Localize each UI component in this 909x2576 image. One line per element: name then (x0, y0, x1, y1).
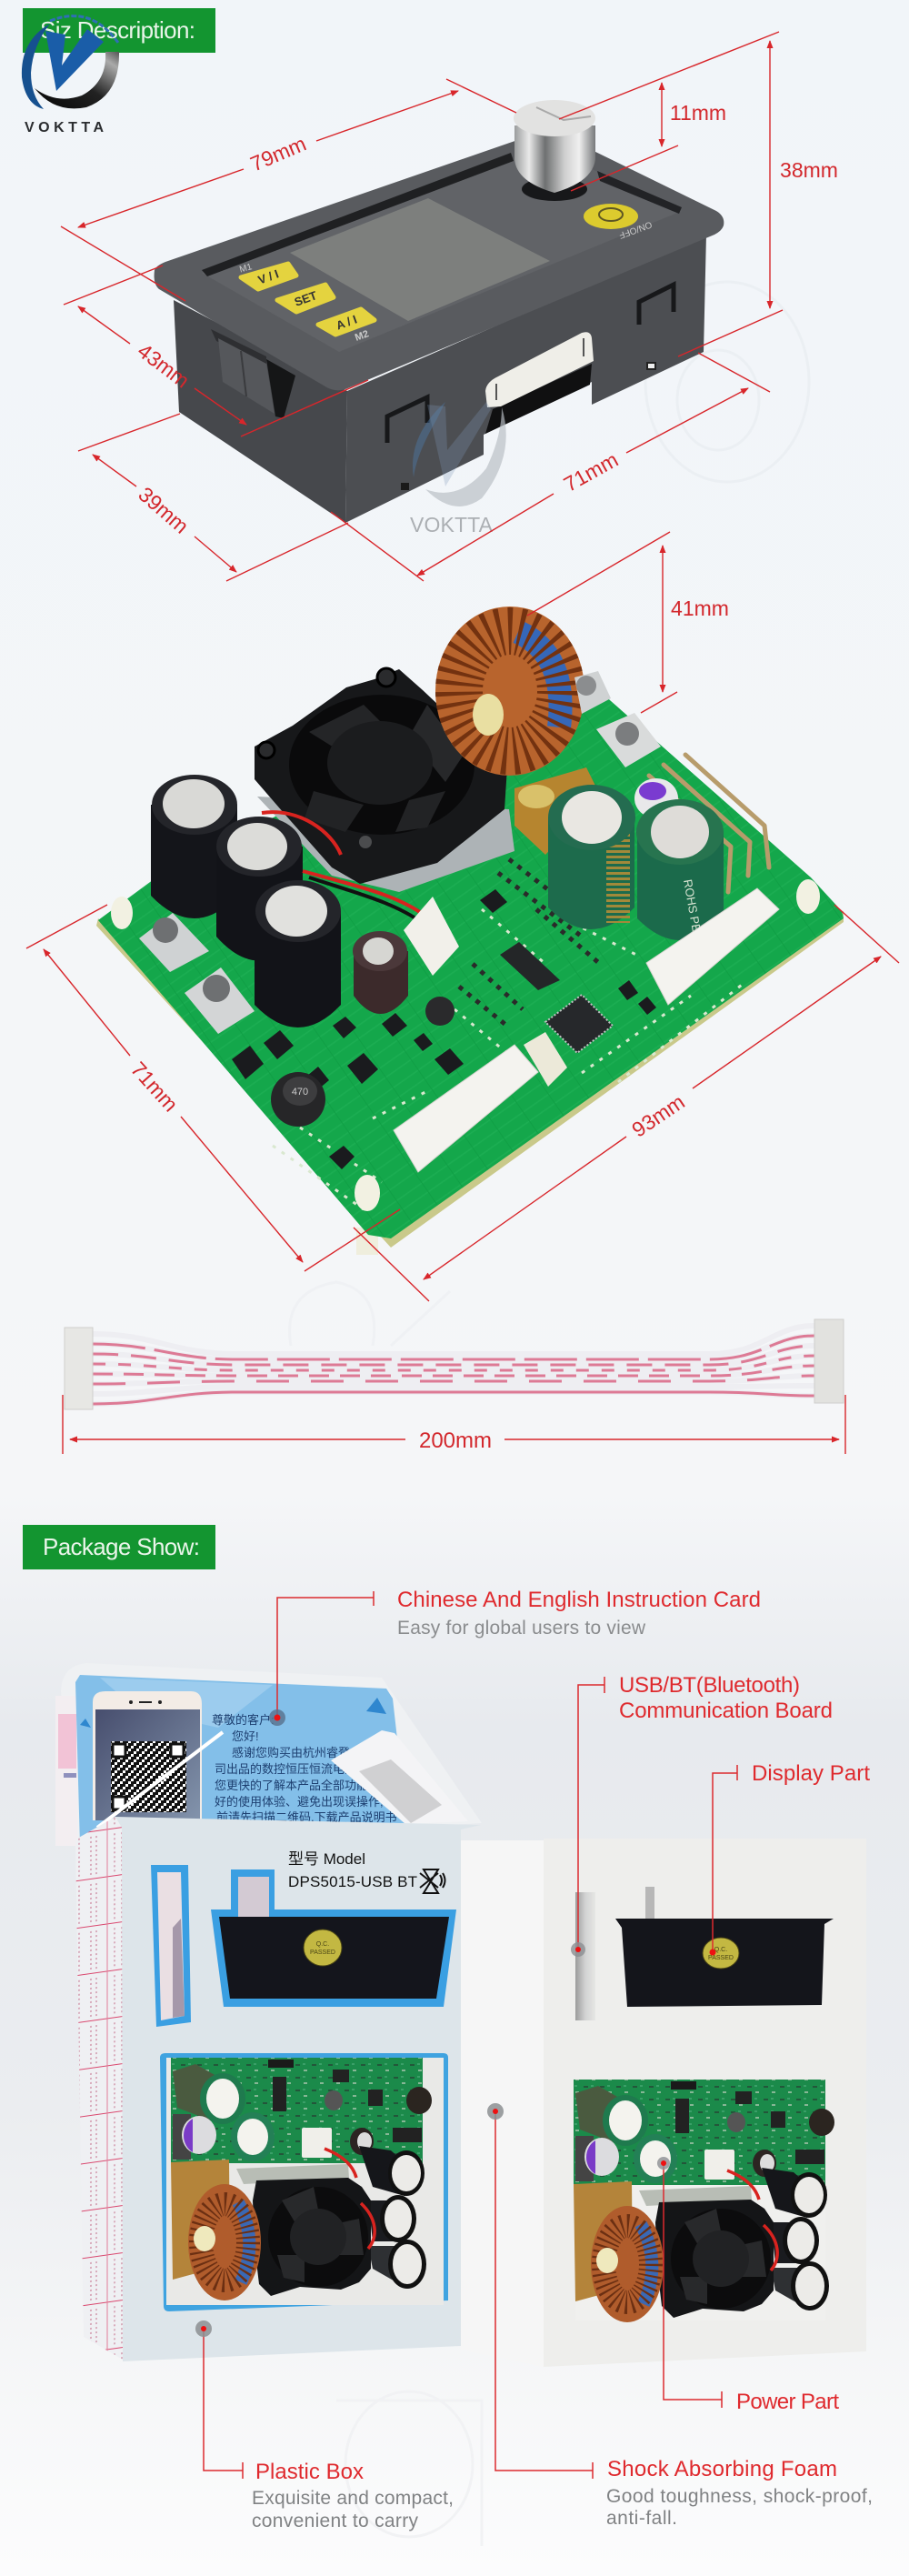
watermark right of module (645, 282, 809, 482)
black capacitors (151, 775, 408, 1027)
model text: 型号 Model (288, 1850, 365, 1868)
card text: 您好! (232, 1729, 259, 1743)
fan connector (404, 897, 459, 976)
callout: plastic box: Plastic Box (255, 2460, 364, 2484)
standoffs (111, 879, 820, 1211)
stacked paper (55, 1696, 77, 1846)
pcb (96, 911, 844, 1248)
toroid inductor (435, 606, 584, 808)
buttons (241, 264, 375, 335)
narrow window (151, 1865, 191, 2027)
dimension labels: board: 93mm (627, 1089, 689, 1142)
display screen (290, 198, 550, 321)
inductors: 470 (292, 1087, 308, 1098)
photo: ribbon cable (65, 1319, 844, 1409)
dimension labels: module: 79mm (247, 132, 309, 175)
white header right (646, 888, 779, 1005)
photo: meter module: M1 (238, 262, 254, 275)
watermark below board (290, 1282, 450, 1346)
card text: 尊敬的客户: (212, 1713, 275, 1727)
callout: display part (709, 1761, 870, 1955)
dimension labels: board: 41mm (671, 596, 729, 620)
box side panel (75, 1817, 123, 2360)
model text: DPS5015-USB BT (288, 1873, 417, 1890)
card text: 您更快的了解本产品全部功能 (215, 1779, 368, 1792)
foam display module: Q.C. (714, 1947, 727, 1953)
foam window (575, 2080, 825, 2320)
callout: foam: Shock Absorbing Foam (607, 2457, 837, 2481)
foam display module (615, 1887, 834, 2007)
white header bottom (394, 1045, 538, 1172)
watermark logo center (410, 402, 506, 536)
heat sink (257, 797, 514, 892)
heading: size description: Siz Description: (40, 16, 195, 44)
buttons: SET (293, 288, 319, 309)
box front (115, 1817, 481, 2361)
connector opening (485, 332, 594, 434)
logo: voktta: VOKTTA (25, 120, 104, 135)
face plate (155, 129, 724, 390)
dimension labels: board: 71mm (126, 1057, 183, 1116)
dimension: cable 200mm: 200mm (419, 1428, 492, 1453)
photo: package box and foam (55, 1663, 866, 2367)
green capacitors (548, 785, 724, 940)
dimension labels: module: 39mm (134, 482, 194, 538)
watermark bottom (336, 2391, 482, 2546)
callout: power part (657, 2157, 839, 2414)
heading: size description (23, 8, 215, 53)
buttons: V / I (256, 266, 281, 286)
card text: 前请先扫描二维码,下载产品说明书 (216, 1810, 397, 1824)
dimension labels: board (126, 596, 729, 1142)
card text: 好的使用体验、避免出现误操作, (215, 1795, 384, 1809)
connector right (814, 1319, 844, 1403)
callout: foam: anti-fall. (606, 2508, 677, 2529)
dimension labels: module: 11mm (670, 101, 726, 125)
dimension labels: module: 43mm (134, 338, 194, 393)
heading: package show (23, 1525, 215, 1569)
op amp chip (500, 942, 560, 990)
buttons: A / I (335, 312, 359, 333)
front face (345, 234, 706, 523)
standoff legs (111, 909, 816, 1255)
power button (584, 204, 638, 229)
fan wires (262, 812, 427, 924)
callout: communication board: USB/BT(Bluetooth) (619, 1673, 800, 1698)
watermark logo center: VOKTTA (410, 513, 494, 536)
side face (174, 300, 347, 523)
photo: meter module: M2 (354, 328, 370, 344)
smd chips (232, 889, 656, 1169)
dimension: cable 200mm (63, 1395, 845, 1454)
card text (212, 1713, 397, 1824)
heading: package show: Package Show: (43, 1533, 200, 1560)
board window (160, 2053, 448, 2311)
callout: plastic box: convenient to carry (252, 2511, 418, 2531)
box board (171, 2058, 432, 2300)
logo: voktta (22, 16, 119, 135)
callout: power part: Power Part (736, 2390, 839, 2414)
current shunts (649, 755, 769, 892)
foam board (574, 2080, 834, 2322)
callout: plastic box (195, 2320, 454, 2531)
callout: instruction card: Chinese And English Instruction Card (397, 1588, 761, 1612)
icon: bluetooth (420, 1869, 445, 1893)
callout: communication board (571, 1673, 833, 1957)
callout: instruction card (269, 1588, 761, 1726)
callout: communication board: Communication Board (619, 1699, 833, 1723)
knob (514, 100, 595, 201)
card text: 司出品的数控恒压恒流电源 (215, 1762, 356, 1776)
card text: 感谢您购买由杭州睿登 (232, 1746, 350, 1759)
microcontroller (545, 995, 613, 1053)
latch cutouts (387, 285, 674, 443)
instruction card (75, 1675, 407, 1846)
dimension labels: module: 71mm (560, 447, 622, 496)
callout: plastic box: Exquisite and compact, (252, 2488, 454, 2509)
inductors (271, 997, 454, 1127)
phone with QR code (93, 1691, 202, 1820)
screw terminals (139, 671, 661, 1034)
foam display module: PASSED (708, 1955, 734, 1961)
photo: meter module: ON/OFF (617, 219, 653, 240)
photo: circuit board (96, 606, 844, 1255)
silkscreen parts (273, 859, 745, 1209)
model text (288, 1850, 417, 1890)
foam block (461, 1839, 866, 2367)
small white card (331, 1730, 468, 1824)
dimension labels: module (134, 101, 838, 538)
purple capacitor (634, 778, 678, 818)
small connector (524, 1032, 567, 1087)
photo: meter module (155, 100, 724, 523)
rocker clip (211, 329, 295, 418)
display window: Q.C. (316, 1941, 329, 1948)
box back lid (61, 1663, 482, 1846)
fan (255, 668, 507, 884)
callout: foam (487, 2103, 873, 2529)
callout: foam: Good toughness, shock-proof, (606, 2486, 873, 2507)
callout: display part: Display Part (752, 1761, 870, 1786)
dimensions: board (26, 532, 899, 1301)
kapton (514, 767, 601, 855)
display window (211, 1869, 456, 2007)
display window: PASSED (310, 1950, 335, 1956)
dimensions: module (61, 32, 783, 581)
dimension labels: module: 38mm (780, 158, 838, 182)
green capacitors: ROHS PET (681, 878, 704, 940)
foam slot (575, 1892, 595, 2020)
callout: instruction card: Easy for global users to view (397, 1618, 646, 1639)
connector left (65, 1328, 93, 1409)
